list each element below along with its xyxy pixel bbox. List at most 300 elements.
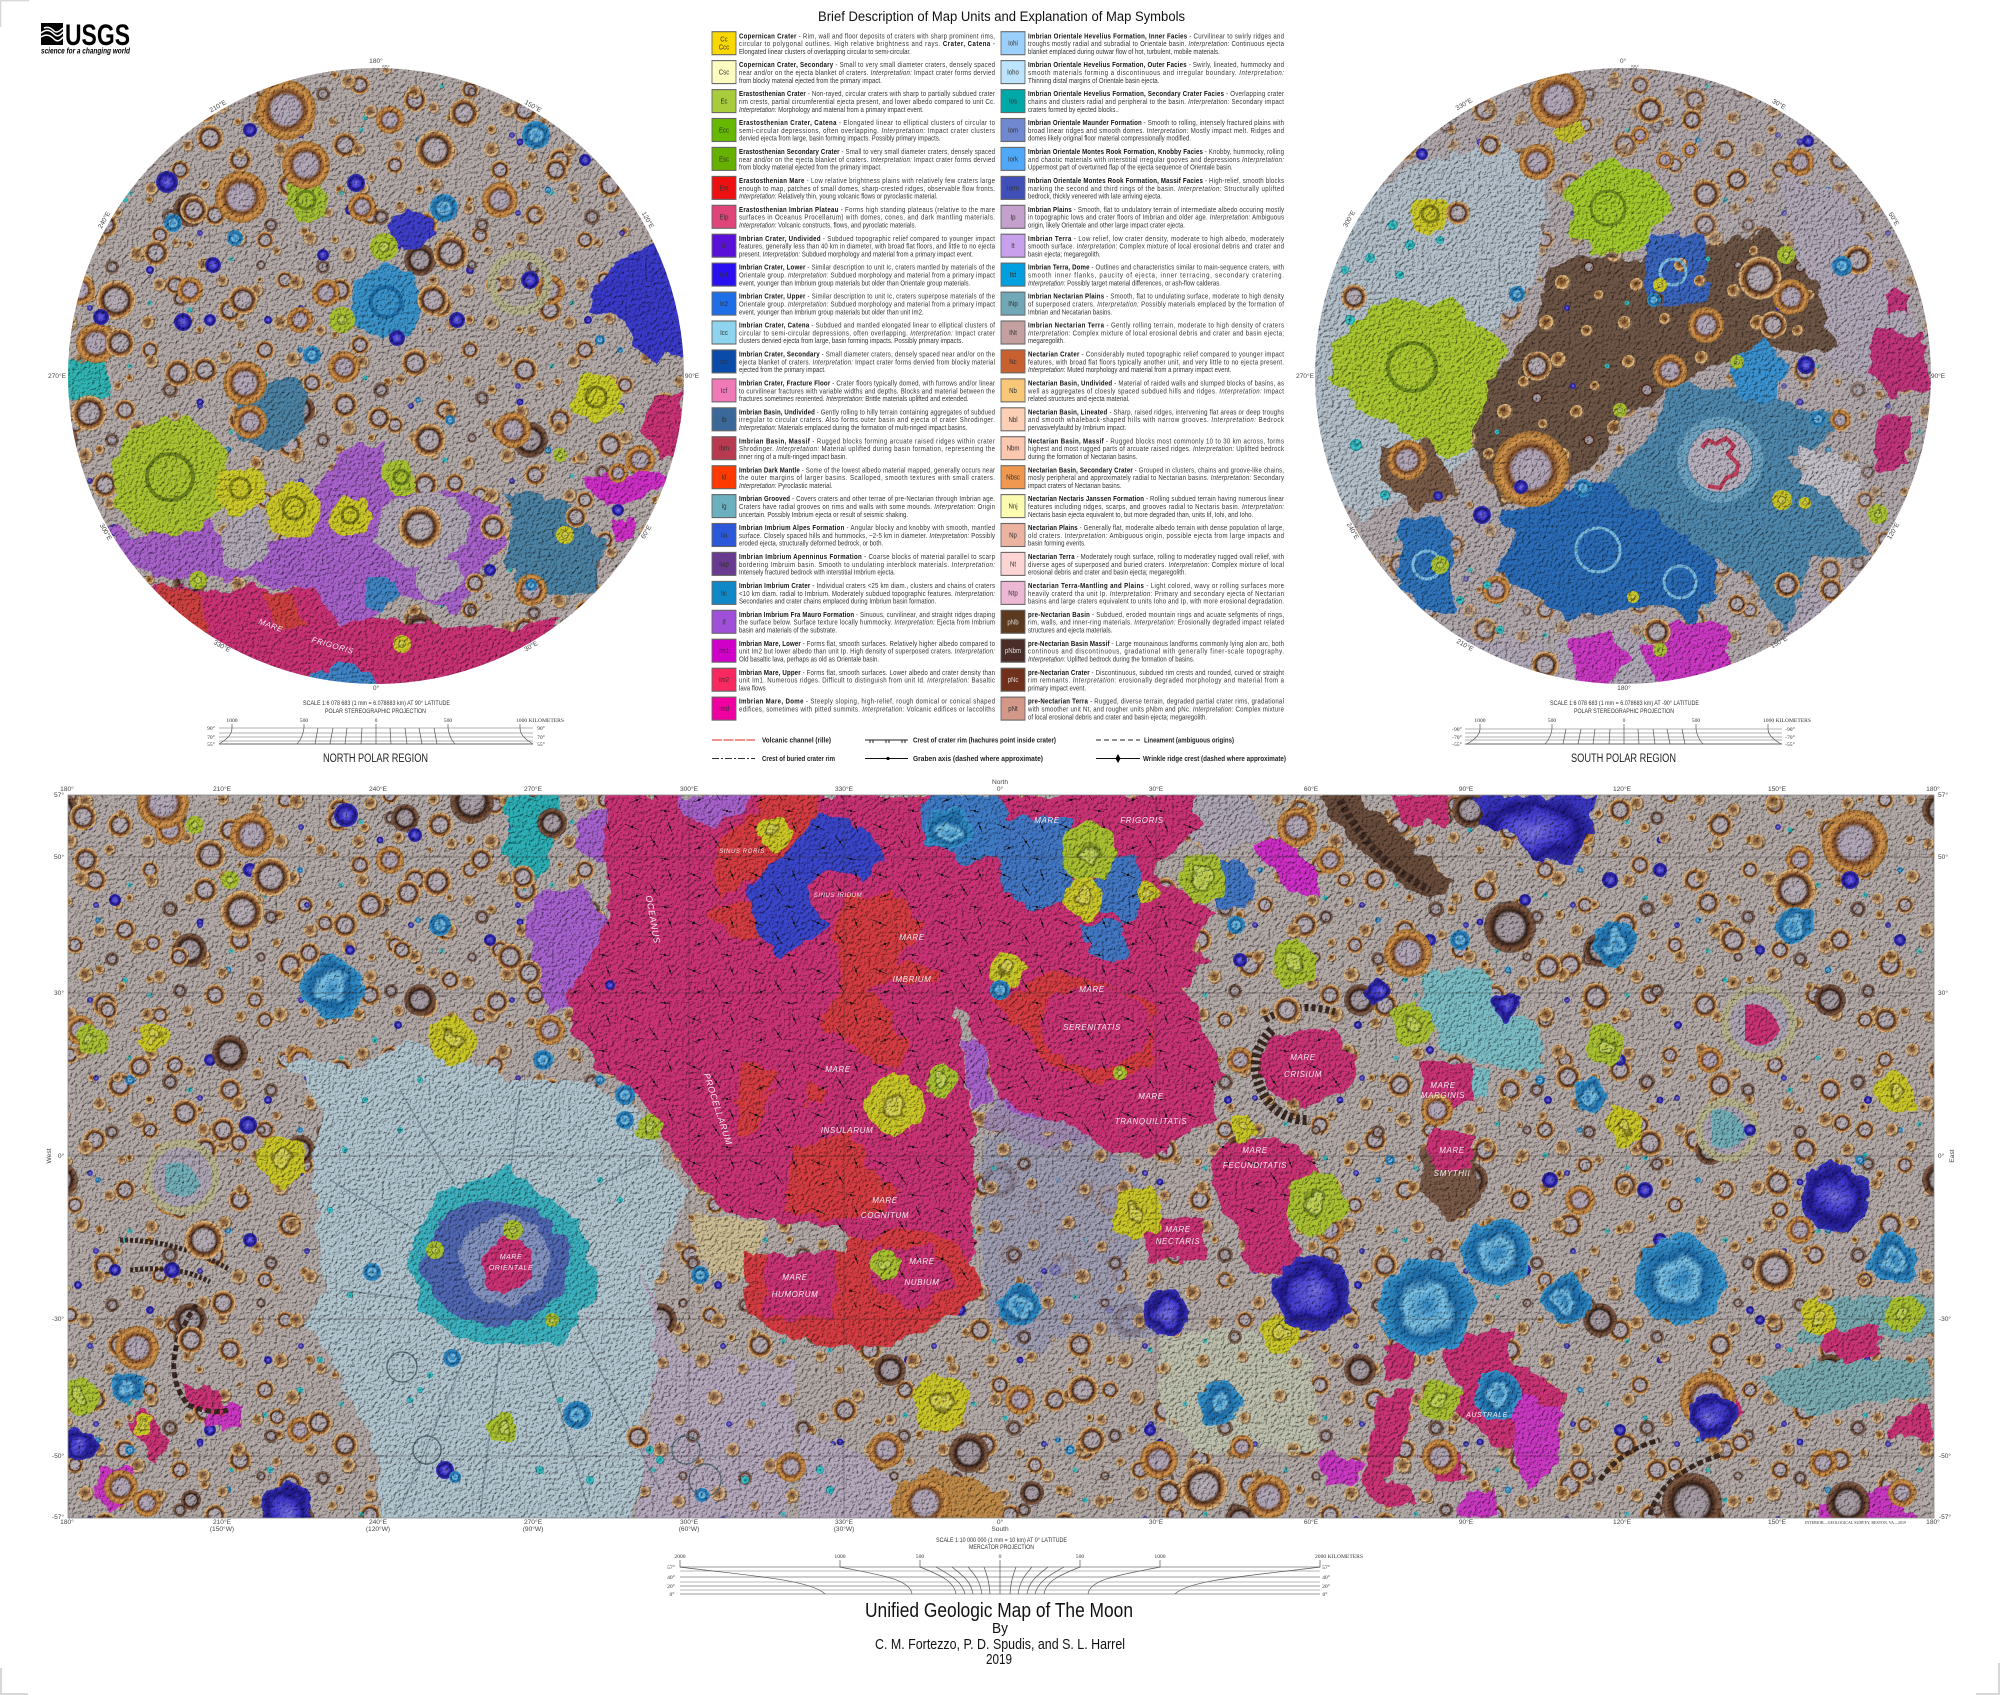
unit Im2: lava flows [739,685,766,693]
unit Csc: near and/or on the ejecta blanket of craters. Interpretation: Impact crater forms dervied [739,69,995,77]
unit Ibm: Shrodinger. Interpretation: Material uplifted during basin formation, representing the [739,446,995,453]
unit Icf: Icf [721,387,727,395]
main map longitude labels top [60,779,1940,793]
USGS logo [41,19,131,56]
main scale block [667,1536,1363,1598]
unit Np: basin forming events. [1028,540,1086,548]
main map longitude labels bottom: (30°W) [834,1525,854,1533]
unit Ib: Ib [721,416,727,424]
main map longitude labels top: 0° [997,785,1004,793]
title: Unified Geologic Map of The Moon [865,1600,1133,1622]
south scale block: -90° [1785,726,1795,733]
unit Im2 [712,668,995,693]
main map longitude labels bottom: (120°W) [366,1525,390,1533]
symbol: crater rim crest: Crest of crater rim (hachures point inside crater) [913,736,1056,744]
unit Iic: <10 km diam. radial to Imbrium. Moderately subdued topographic features. Interpretation: [739,590,995,598]
unit Ig: Imbrian Grooved - Covers craters and other terrae of pre-Nectarian through Imbrian age. [739,496,995,503]
main map longitude labels top: 120°E [1613,785,1632,793]
unit Iom: Iom [1008,127,1018,135]
unit Np: Np [1009,532,1017,540]
unit If [712,610,995,635]
main map longitude labels bottom: (150°W) [210,1525,234,1533]
unit Nnj: Nectarian Nectaris Janssen Formation - Rolling subdued terrain having numerous linear [1028,496,1285,503]
ghost crater floors [165,1004,1780,1196]
main map longitude labels bottom: 180° [1926,1518,1940,1526]
unit Iom [1001,118,1284,143]
main scale block: SCALE 1:10 000 000 (1 mm = 10 km) AT 0° LATITUDE [936,1536,1067,1544]
unit If: If [722,619,726,627]
south craters [1387,72,1850,604]
label: Mare Frigoris [258,618,354,654]
symbol: graben axis: Graben axis (dashed where approximate) [913,754,1043,763]
unit Iork: Imbrian Orientale Montes Rook Formation, Knobby Facies - Knobby, hummocky, rolling [1028,148,1284,156]
north texture [68,68,684,684]
colored crater blobs [60,795,1922,1536]
unit Isc: Isc [720,358,728,366]
unit Ios: Imbrian Orientale Hevelius Formation, Secondary Crater Facies - Overlapping crater [1028,91,1285,98]
main map longitude labels top: North [992,779,1008,786]
unit Itd: Imbrian Terra, Dome - Outlines and characteristics similar to main-sequence craters, with [1028,264,1284,272]
unit Csc: from blocky material ejected from the primary impact. [739,77,882,85]
unit pNb [1001,610,1284,635]
unit Ec: Erastosthenian Crater - Non-rayed, circular craters with sharp to partially subdued crater [739,91,996,98]
main map longitude labels bottom: 300°E [680,1518,699,1526]
main map longitude labels top: 300°E [680,785,699,793]
south scale block: -55° [1452,741,1462,748]
unit Im2: Imbrian Mare, Upper - Forms flat, smooth surfaces. Lower albedo and crater density than [739,669,995,677]
south polar graticule labels: 0° [1620,57,1627,65]
unit Iohi: Imbrian Orientale Hevelius Formation, Inner Facies - Curvilinear to swirly ridges and [1028,33,1284,41]
unit Nbm: highest and most rugged parts of arcuate raised ridges. Interpretation: Uplifted bedrock [1028,446,1284,453]
main map latitude labels: -57° [52,1513,64,1521]
thin rings in Orientale ejecta [387,1352,721,1496]
unit Iia: surface. Closely spaced hills and hummocks, ~2-5 km in diameter. Interpretation: Possibly [739,532,995,540]
unit Cc: circular to polygonal outlines. High relative brightness and rays. Crater, Catena - [739,41,995,48]
north polar graticule labels: 150°E [523,98,543,115]
south polar graticule labels: 330°E [1454,96,1474,112]
unit Nb: well as aggregates of cloesly spaced subdued hills and ridges. Interpretation: Impact [1027,388,1284,396]
unit Nnj [1001,495,1285,519]
large craters [69,803,1899,1511]
unit Iohi [1001,32,1284,56]
south scale block: POLAR STEREOGRAPHIC PROJECTION [1574,708,1674,715]
mare labels: NECTARIS [1156,1237,1200,1246]
unit Em: enough to map, patches of small domes, sharp-crested ridges, observable flow fronts. [739,185,995,193]
unit Nt [1001,552,1284,577]
north lime satellites [189,233,574,653]
unit Nbm: during the formation of Nectarian basins. [1028,453,1137,461]
unit Iohi: troughs mostly radial and subradial to Orientale basin. Interpretation: Continuous ejecta [1028,41,1284,48]
unit pNc: rim remnants. Interpretation: erosionally degraded morphology and material from a [1028,677,1284,685]
unit Imd: Imbrian Mare, Dome - Steeply sloping, high-relief, rough domical or conical shaped [739,698,995,706]
unit Itd: Interpretation: Possibly target material differences, or ash-flow calderas. [1028,280,1221,288]
mare labels: MARE [872,1196,898,1205]
unit Iic: Imbrian Imbrium Crater - Individual craters <25 km diam., clusters and chains of craters [739,582,995,590]
unit Nbl: and smooth whaleback-shaped hills with narrow grooves. Interpretation: Bedrock [1028,417,1284,424]
main map longitude labels bottom: 30°E [1149,1518,1164,1526]
unit Ic2: event, younger than Imbrium group materials but older than unit Im2. [739,309,924,317]
main map longitude labels top: 210°E [213,785,232,793]
south central basin rings [1388,191,1758,598]
main map latitude labels: 50° [54,853,64,861]
unit Ic2: Imbrian Crater, Upper - Similar description to unit Ic, craters superpose materials of the [739,293,995,301]
unit Itd [1001,263,1284,288]
unit Iiap: Iiap [719,561,729,569]
main map longitude labels top: 180° [1926,785,1940,793]
unit pNt [1001,697,1284,722]
unit Iorm: bedrock, thickly veneered with late arriving ejecta. [1028,193,1162,201]
unit Iiap: Imbrian Imbrium Apenninus Formation - Coarse blocks of material parallel to scarp [739,553,995,561]
symbol: lineament: Lineament (ambiguous origins) [1144,736,1234,744]
main map longitude labels bottom [60,1518,1940,1533]
unit Ntp: Nectarian Terra-Mantling and Plains - Light colored, wavy or rolling surfaces more [1028,582,1284,590]
north scale block: 90° [207,725,215,732]
north polar graticule labels: 180° [369,57,383,65]
main map latitude labels: -30° [52,1315,64,1323]
unit Iic: Secondaries and crater chains emplaced during Imbrium basin formation. [739,598,936,606]
unit INp: Imbrian Nectarian Plains - Smooth, flat to undulating surface, moderate to high density [1028,293,1284,301]
unit INp [1001,292,1284,317]
unit pNb: pNb [1007,619,1019,627]
mare labels: MARE [899,933,925,942]
unit Cc: Ccc [719,44,730,52]
wrinkle ridges on maria [568,795,1352,1320]
mare labels [489,816,1508,1419]
mare labels: ORIENTALE [489,1265,533,1272]
unit Iom: domes likely original floor material compressionally modified. [1028,135,1191,143]
unit Ecc: dervied ejecta from large, basin forming impacts. Possibly primary impacts. [739,135,941,143]
north polar graticule labels [48,57,700,692]
north polar graticule labels: 30°E [523,639,540,653]
south texture [1315,68,1931,684]
unit Ic1: Orientale group. Interpretation: Subdued morphology and material from a primary impact [739,272,995,280]
unit Nnj: Nnj [1008,503,1018,511]
unit Ioho: Ioho [1007,69,1019,77]
legend column 2 [1001,32,1285,722]
unit Ioho: smooth materials forming a discontinuous and irregular boundary. Interpretation: [1028,69,1284,77]
Orientale basin [410,1170,600,1345]
unit Nbm: Nectarian Basin, Massif - Rugged blocks most commonly 10 to 30 km across, forms [1028,438,1284,446]
unit Ibm [712,437,996,461]
mare labels: TRANQUILITATIS [1115,1117,1187,1126]
unit Nbm: Nbm [1007,445,1020,453]
unit pNt: pre-Nectarian Terra - Rugged, diverse terrain, degraded partial crater rims, gradational [1028,698,1284,706]
unit pNbm [1001,639,1284,664]
north scale block: POLAR STEREOGRAPHIC PROJECTION [325,708,426,715]
unit Icf: Imbrian Crater, Fracture Floor - Crater floors typically domed, with furrows and/or linear [739,380,996,388]
symbol: buried crater rim [712,754,835,763]
unit Id: Interpretation: Pyroclastic material. [739,482,833,490]
unit Nc: Nc [1009,358,1017,366]
north polar graticule labels: 90°E [685,372,700,380]
unit pNbm: continous and discontinuous, gradational with generally finer-scale topography. [1028,648,1284,656]
unit pNbm: pNbm [1005,648,1021,655]
unit Im1: Im1 [719,648,729,655]
main scale block: 2000 [674,1554,686,1560]
main map latitude labels: -30° [1939,1315,1951,1323]
unit Nb: Nectarian Basin, Undivided - Material of raided walls and slumped blocks of basins, as [1028,380,1284,388]
mare labels: SERENITATIS [1063,1023,1121,1032]
unit Esc: near and/or on the ejecta blanket of craters. Interpretation: Impact crater forms dervied [739,156,995,164]
unit Ib: irregular to circular craters. Also forms outer basin and ejecta of crater Shrodinger. [739,417,995,424]
unit Nbsc [1001,466,1284,490]
crop mark: bottom right [1976,1663,1999,1694]
main scale block: 20° [667,1583,675,1590]
panel: main Mercator map [60,777,1938,1536]
map texture [68,795,1934,1518]
main map longitude labels top: 180° [60,785,74,793]
mare labels: MARGINIS [1421,1091,1465,1100]
heading: north polar region: NORTH POLAR REGION [323,753,428,765]
USGS logo: science for a changing world [41,46,131,56]
unit Icf [712,379,996,403]
unit Esc: from blocky material ejected from the primary impact. [739,164,882,172]
terrain units [274,795,1938,1530]
mare labels: COGNITUM [861,1211,909,1220]
main scale block: 0° [669,1591,675,1598]
unit Em: Interpretation: Relatively thin, young volcanic flows or pyroclastic material. [739,193,938,201]
unit Ig: uncertain. Possibly Imbrium ejecta or result of seismic shaking. [739,511,908,519]
unit Esc: Esc [719,156,730,164]
symbol: crater rim crest [865,736,1056,744]
unit Em [712,176,995,201]
main scale block: 500 [916,1554,924,1560]
main map longitude labels bottom: 240°E [369,1518,388,1526]
mare labels: NUBIUM [904,1278,940,1287]
north scale block: 0 [375,718,378,724]
unit It: Imbrian Terra - Low relief, low crater density, moderate to high albedo, moderately [1028,235,1284,243]
unit Im2: unit Im1. Numerous ridges. Difficult to distinguish from unit Id. Interpretation: Basaltic [739,677,995,685]
main map longitude labels top: 90°E [1459,785,1474,793]
main scale block: 1000 [1154,1554,1166,1560]
mare labels: MARE [1034,816,1060,825]
mare labels: FRIGORIS [1120,816,1164,825]
mare labels: MARE [500,1254,522,1261]
unit Icc: clusters dervied ejecta from large, basin forming impacts. Possibly primary impacts. [739,338,963,345]
unit Csc [712,61,995,85]
legend heading: Brief Description of Map Units and Explanation of Map Symbols [818,9,1185,24]
maria [95,795,1931,1525]
unit Nc: Interpretation: Muted morphology and material from a primary impact event. [1028,367,1231,374]
south scale block: -90° [1452,726,1462,733]
unit Icf: to curvilinear fractures with variable widths and depths. Blocks and material between the [739,388,995,396]
unit pNb: pre-Nectarian Basin - Subdued, eroded mountain rings and acuate sefgments of rings, [1028,611,1284,619]
north polar graticule labels: 330°E [212,638,232,655]
geologic units south [1300,115,1930,700]
unit If: Imbrian Imbrium Fra Mauro Formation - Sinuous, curvilinear, and straight ridges draping [739,611,995,619]
small scattered craters [164,803,1859,1479]
south scale block: -70° [1452,734,1462,741]
unit Ic2: Ic2 [720,301,728,308]
unit Imd: Imd [719,706,729,713]
unit Iorm: Imbrian Orientale Montes Rook Formation, Massif Facies - High-relief, smooth blocks [1028,177,1284,185]
symbol: wrinkle ridge [1096,754,1286,763]
unit Np [1001,524,1284,548]
north scale block: SCALE 1:6 078 683 (1 mm = 6.078683 km) AT 90° LATITUDE [303,699,450,707]
mare labels: HUMORUM [772,1290,818,1299]
main map latitude labels [46,791,1956,1521]
unit Iom: broad linear ridges and smooth domes. Interpretation: Mostly impact melt. Ridges and [1028,127,1284,135]
unit pNc: pre-Nectarian Crater - Discontinuous, subdued rim crests and rounded, curved or straight [1028,669,1284,677]
unit Ic1: Ic1 [720,272,728,279]
unit Iork: Uppermost part of overturned flap of the ejecta sequence of Orientale basin. [1028,164,1233,172]
unit If: the surface below. Surface texture locally hummocky. Interpretation: Ejecta from Imbrium [739,619,995,627]
unit Nbsc: impact craters of Nectarian basins. [1028,482,1122,490]
unit Iohi: Iohi [1008,40,1018,48]
unit INp: INp [1008,301,1018,308]
unit Ib: Interpretation: Materials emplaced during the formation of multi-ringed impact basins. [739,424,967,432]
mare labels: MARE [1290,1053,1316,1062]
crater overlay on plains and highlands [637,1130,1320,1523]
main map latitude labels: 30° [54,989,64,997]
unit Icc [712,321,996,345]
south polar graticule labels: 60°E [1887,211,1901,228]
mare labels: MARE [782,1273,808,1282]
year: 2019 [986,1651,1012,1668]
unit EIp: surfaces in Oceanus Procellarum) with domes, cones, and dark mantling materials. [739,214,995,222]
north scale block: 1000 [226,718,238,724]
main map latitude labels: -57° [1939,1513,1951,1521]
ghost ring craters [148,989,1793,1211]
unit Ioho: Imbrian Orientale Hevelius Formation, Outer Facies - Swirly, lineated, hummocky and [1028,62,1284,69]
unit Iom: Imbrian Orientale Maunder Formation - Smooth to rolling, intensely fractured plains with [1028,120,1284,127]
USGS logo: USGS [65,19,130,52]
unit Iiap: Intensely fractured bedrock with interstitial Imbrium ejecta. [739,569,895,577]
unit Cc: Elongated linear clusters of overlapping circular to semi-circular. [739,48,911,56]
south polar graticule labels [1296,57,1946,692]
unit EIp [712,205,995,230]
unit Nc: features, with broad flat floors typically another unit, and very little to no ejecta present. [1028,359,1284,367]
unit Ios: Ios [1009,98,1018,106]
south polar graticule labels: 55° [1631,65,1639,71]
main scale block: 20° [1322,1583,1330,1590]
main scale block: 0° [1322,1591,1328,1598]
unit pNc: pNc [1008,677,1019,684]
unit Ntp: basins and large craters equivalent to units Ioho and Ip, with more erosional degradation. [1028,598,1284,606]
mare labels: SINUS RORIS [719,849,765,855]
unit pNbm: Interpretation: Uplifted bedrock during the formation of basins. [1028,656,1195,664]
unit Isc: ejected from the primary impact. [739,367,826,374]
mare labels: IMBRIUM [893,975,931,984]
unit Iia: eroded ejecta, structurally deformed bedrock, or both. [739,540,883,548]
unit Nb: Nb [1009,387,1017,395]
unit Imd [712,697,995,720]
main map longitude labels bottom: 150°E [1768,1518,1787,1526]
main map latitude labels: East [1949,1149,1956,1163]
unit Csc: Csc [719,69,730,77]
unit It: It [1011,243,1015,250]
north scale block: 70° [537,734,545,741]
unit Nb: related structures and ejecta material. [1028,396,1130,403]
unit Ip: Ip [1010,214,1016,222]
radial grooves in Orientale ejecta [330,1090,660,1515]
unit Nbl: pervasivelyfaultd by Imbrium impact. [1028,424,1126,432]
unit Esc: Erastosthenian Secondary Crater - Small to very small diameter craters, densely spaced [739,148,995,156]
main map latitude labels: -50° [52,1452,64,1460]
main map latitude labels: 57° [54,791,64,799]
unit Nbl: Nectarian Basin, Lineated - Sharp, raised ridges, intervening flat areas or deep troughs [1028,409,1284,417]
unit Ip: in topographic lows and crater floors of Imbrian and older age. Interpretation: Ambiguous [1028,214,1284,222]
unit If: basin and materials of the substrate. [739,627,837,635]
unit Id: Id [721,474,727,482]
main map longitude labels bottom: 210°E [213,1518,232,1526]
unit Im1: Imbrian Mare, Lower - Forms flat, smooth surfaces. Relatively higher albedo compared to [739,640,995,648]
unit Ic2: Orientale group. Interpretation: Subdued morphology and material from a primary impact [739,301,995,309]
unit Icc: Icc [720,329,728,337]
north scale block: 55° [207,741,215,748]
main map longitude labels bottom: South [991,1526,1009,1533]
main map longitude labels bottom: 0° [997,1518,1004,1526]
unit Ic [712,234,995,259]
unit Ec: Interpretation: Morphology and material from a primary impact event. [739,106,924,114]
symbol: wrinkle ridge: Wrinkle ridge crest (dashed where approximate) [1143,754,1286,763]
main map longitude labels bottom: 270°E [524,1518,543,1526]
unit Ig: Ig [721,503,727,511]
unit Ecc [712,118,995,143]
unit Nc: Nectarian Crater - Considerably muted topographic relief compared to younger impact [1028,351,1284,359]
main scale block: 40° [1322,1574,1330,1581]
mare labels: MARE [1138,1092,1164,1101]
unit Iorm: marking the second and third rings of the basin. Interpretation: Structurally uplifted [1028,185,1284,193]
north scale block: 55° [537,741,545,748]
dark basin rims [120,800,1720,1515]
unit Csc: Copernican Crater, Secondary - Small to very small diameter craters, densely spaced [739,62,995,69]
mare labels: FECUNDITATIS [1223,1161,1287,1170]
south scale block: 500 [1692,718,1700,724]
main map longitude labels top: 150°E [1768,785,1787,793]
unit Ib [712,408,995,432]
unit Ioho [1001,61,1284,85]
unit EIp: EIp [719,214,729,222]
mare labels: PROCELLARUM [701,1072,734,1146]
south scale block: 500 [1548,718,1556,724]
main map longitude labels top: 330°E [835,785,854,793]
south polar graticule labels: 30°E [1771,97,1788,112]
unit pNt: with smoother unit Nt, and rougher units pNbm and pNc. Interpretation: Complex mixture [1027,706,1284,714]
authors: C. M. Fortezzo, P. D. Spudis, and S. L. Harrel [875,1636,1125,1653]
unit Itd: Itd [1010,272,1017,279]
unit It [1001,234,1284,259]
unit Ip: origin, likely Orientale and other large impact crater ejecta. [1028,222,1185,230]
unit Ibm: Ibm [719,445,729,453]
main map longitude labels bottom: 90°E [1459,1518,1474,1526]
south polar graticule labels: 120°E [1885,521,1902,541]
unit Iohi: blanket emplaced during outwar flow of hot, turbulent, mobile materials. [1028,48,1220,56]
mare labels: CRISIUM [1284,1070,1322,1079]
mare labels: OCEANUS [644,895,662,944]
south crater texture on dark terrain [1471,240,1815,504]
graticule lines [68,795,1934,1518]
south polar graticule labels: 300°E [1341,209,1358,229]
crop mark: bottom left [1,1668,28,1694]
unit Em: Em [719,185,729,193]
unit Nt: Nt [1010,561,1016,569]
main map longitude labels top: 270°E [524,785,543,793]
unit Ig: Craters have radial grooves on rims and walls with some mounds. Interpretation: Origin [739,503,995,511]
unit Ic: Imbrian Crater, Undivided - Subdued topographic relief compared to younger impact [739,235,995,243]
unit Ic: present. Interpretation: Subdued morphology and material from a primary impact event. [739,251,973,259]
unit Ic1: Imbrian Crater, Lower - Similar description to unit Ic, craters mantled by materials of the [739,264,995,272]
north lime and yellow crater centres [147,191,606,523]
unit Nbl [1001,408,1284,432]
main map border [68,795,1934,1518]
unit Icc: circular to semi-circular depressions, often overlapping. Interpretation: Impact crater [739,330,996,338]
unit Iork [1001,147,1284,172]
south polar graticule labels: 90°E [1931,372,1946,380]
unit Ic: Ic [722,243,727,250]
unit Ip: Imbrian Plains - Smooth, flat to undulatory terrain of intermediate albedo occuring mostly [1028,206,1284,214]
unit Iork: Iork [1008,156,1019,164]
